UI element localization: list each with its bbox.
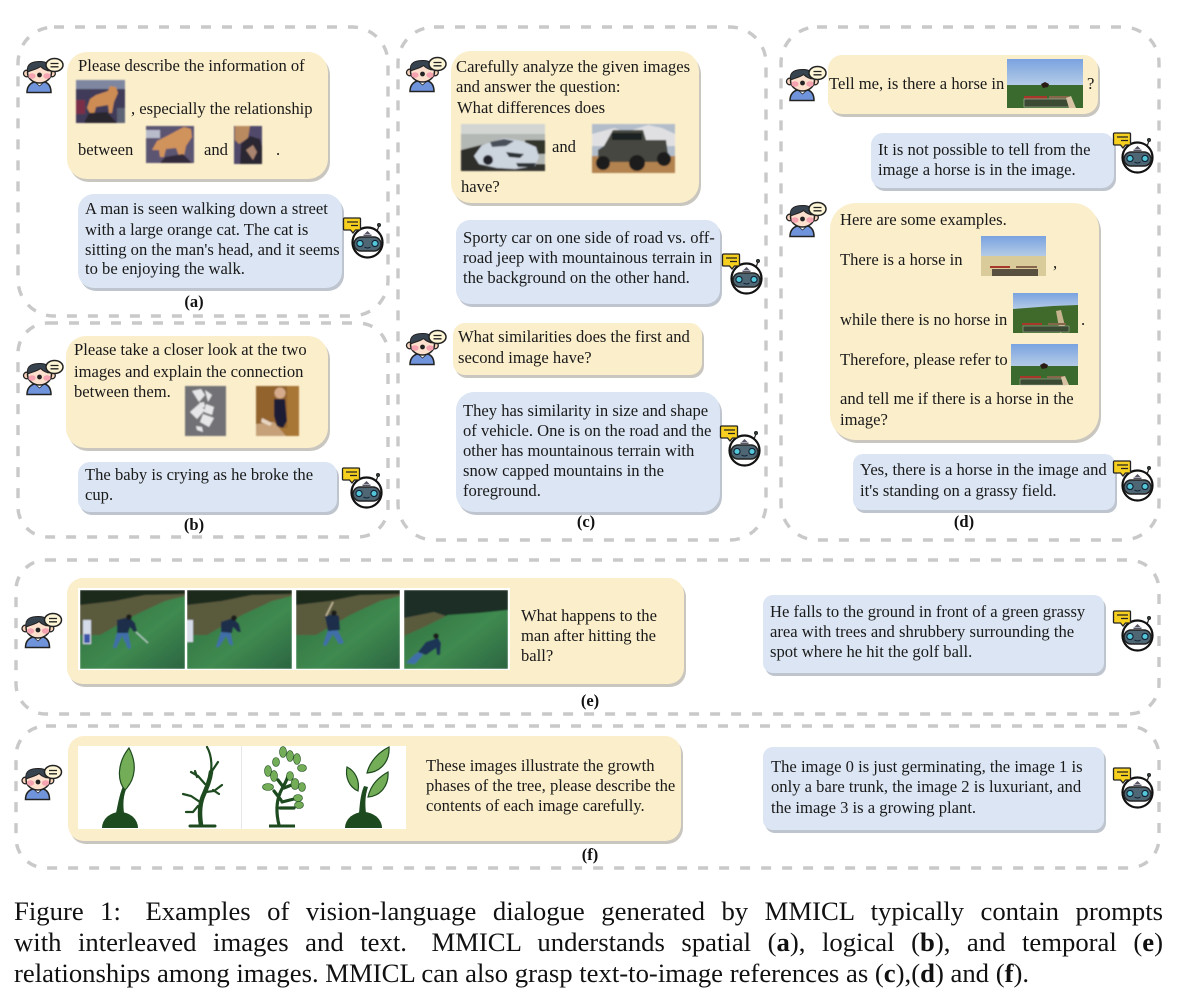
user prompt bubble (a) xyxy=(67,52,330,182)
user prompt bubble (f): phases of the tree, please describe the xyxy=(426,776,675,795)
user prompt bubble (a): , especially the relationship xyxy=(131,99,313,118)
model answer bubble (c) second: snow capped mountains in the xyxy=(463,461,664,480)
icon: user (f) xyxy=(22,766,62,800)
user prompt bubble (e) xyxy=(67,578,686,687)
model answer bubble (d) second: it's standing on a grassy field. xyxy=(860,481,1057,500)
user prompt bubble (d) second: image? xyxy=(840,410,888,429)
user prompt bubble (f) xyxy=(68,736,683,844)
model answer bubble (b): cup. xyxy=(85,485,113,504)
user prompt bubble (c) first xyxy=(451,51,701,206)
model answer bubble (d) second xyxy=(853,454,1117,513)
model answer bubble (c) first xyxy=(456,220,722,307)
model answer bubble (d) second: Yes, there is a horse in the image and xyxy=(860,460,1107,479)
panel: example (a) xyxy=(18,27,388,316)
model answer bubble (e) xyxy=(763,595,1106,676)
label (d): (d) xyxy=(954,512,974,531)
icon: user (a) xyxy=(24,58,63,92)
figure caption xyxy=(14,896,1163,988)
image strip: tree growth phases xyxy=(78,746,406,829)
icon: robot (b) xyxy=(342,468,382,508)
model answer bubble (a): sitting on the man's head, and it seems xyxy=(85,240,340,259)
model answer bubble (f): The image 0 is just germinating, the image 1 is xyxy=(771,757,1083,776)
user prompt bubble (d) second: Therefore, please refer to xyxy=(840,350,1008,369)
model answer bubble (f): the image 3 is a growing plant. xyxy=(771,798,976,817)
label (f): (f) xyxy=(582,845,598,864)
user prompt bubble (d) second: . xyxy=(1081,310,1085,329)
image: query game scene xyxy=(1011,344,1078,385)
user prompt bubble (a): and xyxy=(204,140,229,159)
panel: example (c) xyxy=(398,27,766,540)
user prompt bubble (b) xyxy=(66,336,330,451)
icon: robot (c) first xyxy=(722,254,762,294)
user prompt bubble (d) first xyxy=(828,55,1100,117)
icon: user (b) xyxy=(24,360,63,394)
user prompt bubble (d) first: ? xyxy=(1087,74,1094,93)
icon: robot (d) second xyxy=(1114,461,1152,500)
frame 1 xyxy=(80,590,185,669)
user prompt bubble (f): These images illustrate the growth xyxy=(426,756,655,775)
user prompt bubble (d) second: , xyxy=(1053,253,1057,272)
figure caption: relationships among images. MMICL can also grasp text-to-image references as (c),(d) and (f). xyxy=(14,958,1029,988)
icon: user (d) first xyxy=(786,66,826,100)
image: crying baby xyxy=(256,386,299,436)
user prompt bubble (a): Please describe the information of xyxy=(78,56,305,75)
icon: user (c) second xyxy=(406,330,446,364)
user prompt bubble (c) second xyxy=(453,323,704,378)
image: hillside game scene xyxy=(1013,293,1078,333)
model answer bubble (e): spot where he hit the golf ball. xyxy=(770,642,972,661)
user prompt bubble (d) second: while there is no horse in xyxy=(840,310,1008,329)
label (a): (a) xyxy=(184,292,204,311)
plant: growing seedling xyxy=(345,747,389,828)
icon: user (e) xyxy=(22,614,62,648)
icon: user (c) first xyxy=(406,58,446,92)
image strip: golf swing frames xyxy=(78,588,510,670)
model answer bubble (a): with a large orange cat. The cat is xyxy=(85,220,308,239)
image: game scene with horse xyxy=(1007,59,1083,108)
model answer bubble (c) second: foreground. xyxy=(463,481,541,500)
user prompt bubble (c) first: have? xyxy=(461,177,500,196)
model answer bubble (c) second xyxy=(456,392,722,515)
icon: robot (f) xyxy=(1114,768,1152,808)
user prompt bubble (c) first: What differences does xyxy=(457,98,605,117)
user prompt bubble (a): . xyxy=(276,140,280,159)
user prompt bubble (b): images and explain the connection xyxy=(74,362,304,381)
user prompt bubble (d) second: There is a horse in xyxy=(840,250,963,269)
icon: robot (c) second xyxy=(720,426,760,466)
figure caption: Figure 1: Examples of vision-language dialogue generated by MMICL typically contain prompts xyxy=(14,896,1163,926)
user prompt bubble (d) second: Here are some examples. xyxy=(840,210,1007,229)
model answer bubble (f) xyxy=(763,747,1106,833)
model answer bubble (f): only a bare trunk, the image 2 is luxuriant, and xyxy=(771,777,1082,796)
model answer bubble (b) xyxy=(78,462,339,515)
model answer bubble (c) first: Sporty car on one side of road vs. off- xyxy=(463,228,715,247)
icon: robot (a) xyxy=(344,218,382,258)
model answer bubble (a) xyxy=(78,194,344,291)
plant: bare trunk xyxy=(183,747,222,826)
user prompt bubble (d) second xyxy=(830,203,1101,443)
model answer bubble (d) first: image a horse is in the image. xyxy=(878,160,1076,179)
model answer bubble (e): area with trees and shrubbery surrounding the xyxy=(770,622,1074,641)
image: man crop xyxy=(234,126,262,164)
user prompt bubble (d) first: Tell me, is there a horse in xyxy=(829,74,1005,93)
model answer bubble (b): The baby is crying as he broke the xyxy=(85,465,313,484)
model answer bubble (c) second: other has mountainous terrain with xyxy=(463,441,695,460)
model answer bubble (a): to be enjoying the walk. xyxy=(85,259,245,278)
user prompt bubble (f): contents of each image carefully. xyxy=(426,796,645,815)
panel: example (d) xyxy=(781,27,1159,540)
user prompt bubble (c) first: and answer the question: xyxy=(456,77,621,96)
panel: example (e) xyxy=(16,560,1159,714)
user prompt bubble (b): Please take a closer look at the two xyxy=(74,340,307,359)
panel: example (f) xyxy=(16,726,1159,868)
image: sports car xyxy=(461,124,545,171)
image: off-road jeep xyxy=(592,124,675,173)
icon: robot (e) xyxy=(1114,611,1152,650)
model answer bubble (c) second: They has similarity in size and shape xyxy=(463,401,708,420)
user prompt bubble (e): man after hitting the xyxy=(521,626,656,645)
frame 3 xyxy=(296,590,400,669)
image: desert game scene xyxy=(981,236,1046,276)
user prompt bubble (c) second: What similarities does the first and xyxy=(458,327,690,346)
user prompt bubble (c) first: Carefully analyze the given images xyxy=(456,57,690,76)
model answer bubble (c) second: of vehicle. One is on the road and the xyxy=(463,421,711,440)
icon: robot (d) first xyxy=(1114,133,1152,172)
model answer bubble (d) first xyxy=(871,133,1116,191)
user prompt bubble (e): What happens to the xyxy=(521,606,657,625)
figure caption: with interleaved images and text. MMICL understands spatial (a), logical (b), and temporal (e) xyxy=(14,927,1163,957)
image: man with cat xyxy=(76,80,125,123)
label (c): (c) xyxy=(577,512,595,531)
icon: user (d) second xyxy=(786,202,826,236)
plant: leafy tree xyxy=(262,746,306,826)
frame 4 xyxy=(404,590,508,669)
model answer bubble (c) first: road jeep with mountainous terrain in xyxy=(463,248,713,267)
user prompt bubble (d) second: and tell me if there is a horse in the xyxy=(840,389,1074,408)
model answer bubble (d) first: It is not possible to tell from the xyxy=(878,140,1090,159)
user prompt bubble (c) second: second image have? xyxy=(458,348,592,367)
image: broken cup shards xyxy=(185,386,226,436)
user prompt bubble (a): between xyxy=(78,140,134,159)
model answer bubble (c) first: the background on the other hand. xyxy=(463,268,690,287)
image: cat crop xyxy=(146,126,194,163)
panel: example (b) xyxy=(18,323,388,537)
user prompt bubble (b): between them. xyxy=(74,382,171,401)
user prompt bubble (c) first: and xyxy=(552,137,577,156)
frame 2 xyxy=(187,590,292,669)
user prompt bubble (e): ball? xyxy=(521,646,553,665)
label (e): (e) xyxy=(581,691,599,710)
plant: germinating sprout xyxy=(102,748,138,828)
model answer bubble (a): A man is seen walking down a street xyxy=(85,199,328,218)
model answer bubble (e): He falls to the ground in front of a green grassy xyxy=(770,602,1086,621)
label (b): (b) xyxy=(184,515,204,534)
